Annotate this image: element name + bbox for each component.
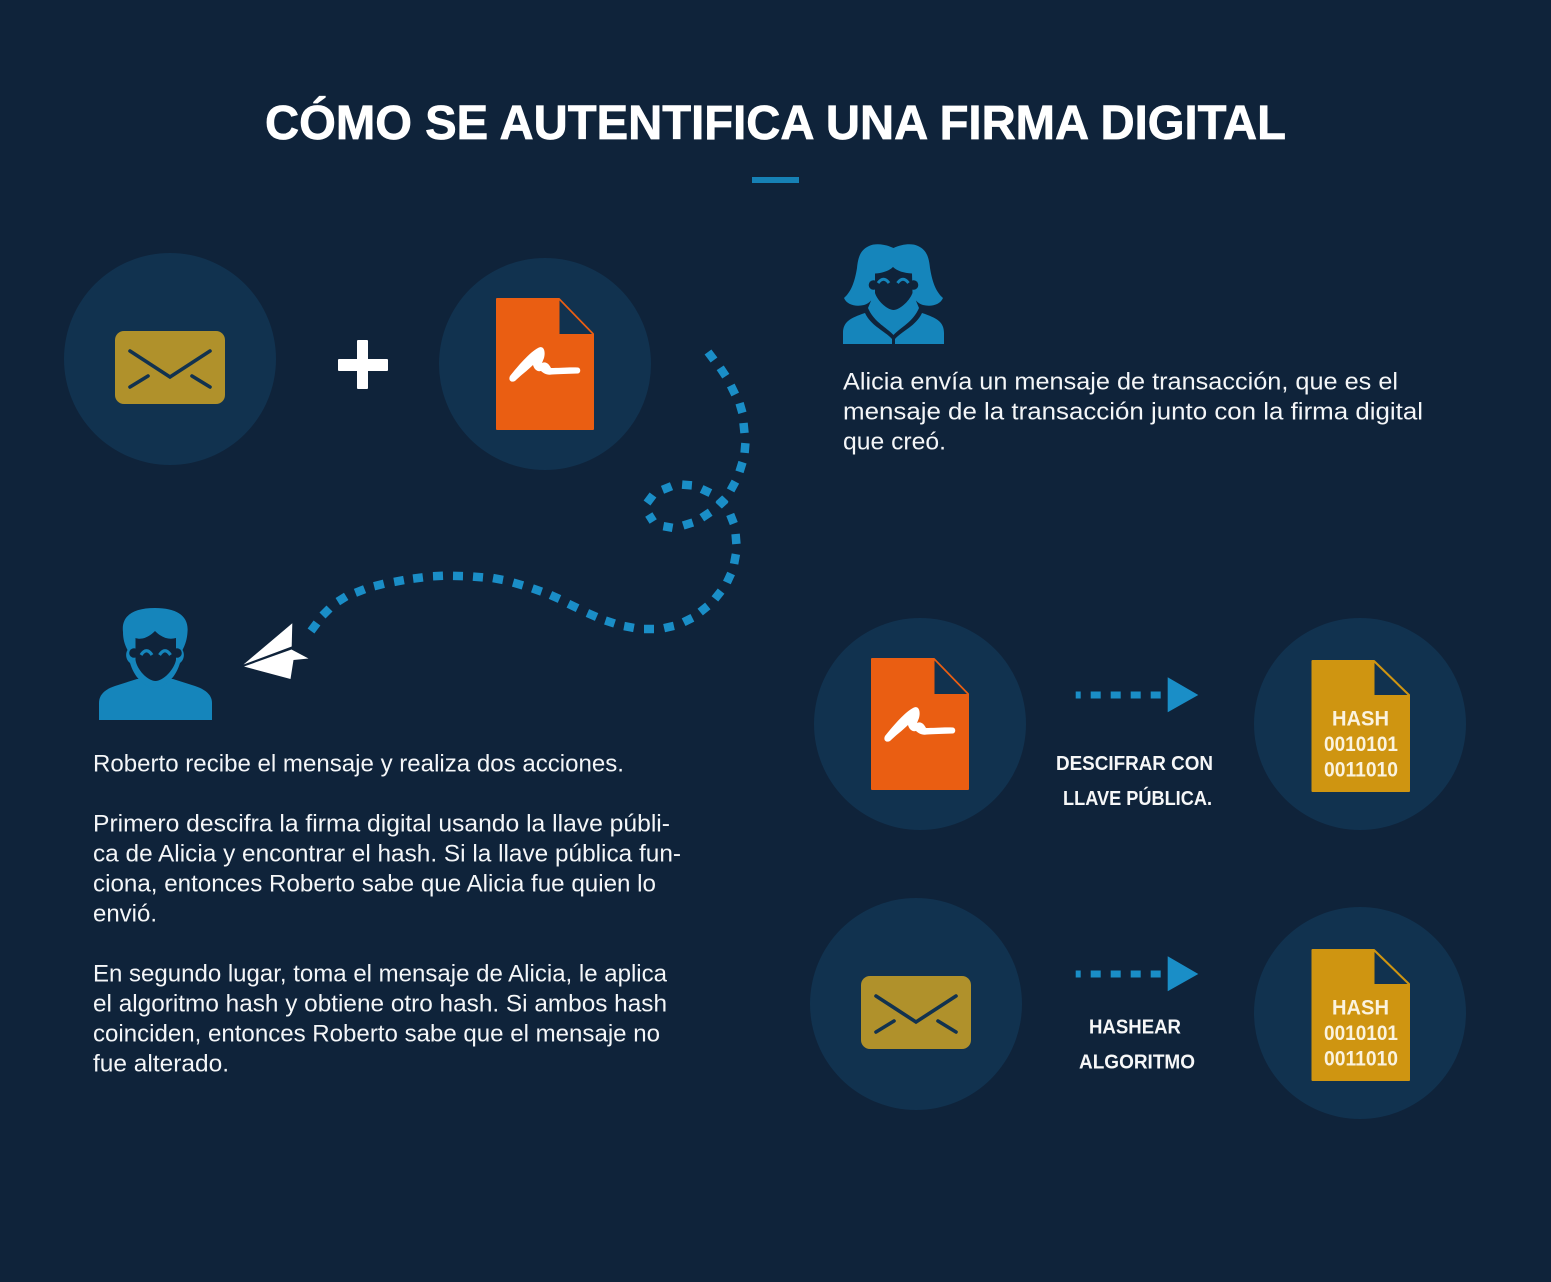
- panel: hash algorithm: [810, 898, 1466, 1119]
- label: descifrar con llave pública: DESCIFRAR CON: [1056, 753, 1213, 775]
- text: Roberto: En segundo lugar, toma el mensaje de Alicia, le aplica: [93, 960, 668, 988]
- text: Roberto: ca de Alicia y encontrar el hash. Si la llave pública fun-: [93, 840, 681, 868]
- text: Roberto: Primero descifra la firma digital usando la llave públi-: [93, 810, 670, 838]
- circle with hash document icon: HASH: [1332, 996, 1389, 1020]
- text: Alicia: mensaje de la transacción junto con la firma digital: [843, 398, 1423, 426]
- text: Alicia: Alicia envía un mensaje de transacción, que es el: [843, 368, 1398, 396]
- label: descifrar con llave pública: LLAVE PÚBLICA.: [1063, 786, 1212, 810]
- title underline: [752, 177, 799, 183]
- circle with hash document icon: [1254, 618, 1466, 830]
- arrow: dotted right: [1076, 677, 1198, 712]
- title: CÓMO SE AUTENTIFICA UNA FIRMA DIGITAL: [265, 95, 1286, 150]
- arrow: dotted right: [1076, 956, 1198, 991]
- panel: decrypt with public key: [814, 618, 1466, 830]
- text: Roberto: ciona, entonces Roberto sabe que Alicia fue quien lo: [93, 870, 656, 898]
- circle with hash document icon: 0010101: [1324, 1022, 1398, 1045]
- circle with signed document icon: [439, 258, 651, 470]
- icon: paper plane: [244, 623, 308, 679]
- label: descifrar con llave pública: [1056, 753, 1213, 810]
- arrow: dotted looping path: [311, 352, 745, 631]
- text: Roberto: fue alterado.: [93, 1050, 229, 1078]
- circle with hash document icon: [1254, 907, 1466, 1119]
- label: hashear algoritmo: [1079, 1016, 1195, 1074]
- text: Alicia: que creó.: [843, 428, 946, 456]
- text: Alicia: [843, 368, 1423, 456]
- icon: Roberto: [99, 608, 212, 720]
- circle with hash document icon: 0010101: [1324, 733, 1398, 756]
- icon: Alicia: [843, 244, 944, 344]
- circle with hash document icon: 0011010: [1324, 1048, 1398, 1070]
- plus sign: [339, 341, 387, 388]
- text: Roberto: envió.: [93, 900, 157, 928]
- label: hashear algoritmo: ALGORITMO: [1079, 1052, 1195, 1074]
- circle with hash document icon: HASH: [1332, 708, 1389, 730]
- circle with envelope icon: [810, 898, 1022, 1110]
- circle with hash document icon: 0011010: [1324, 758, 1398, 782]
- panel: message plus signature: [64, 253, 651, 470]
- circle with signed document icon: [814, 618, 1026, 830]
- text: Roberto: coinciden, entonces Roberto sabe que el mensaje no: [93, 1020, 660, 1048]
- text: Roberto: el algoritmo hash y obtiene otro hash. Si ambos hash: [93, 990, 667, 1018]
- text: Roberto: [93, 750, 681, 1078]
- label: hashear algoritmo: HASHEAR: [1089, 1016, 1182, 1038]
- circle with envelope icon: [64, 253, 276, 465]
- text: Roberto: Roberto recibe el mensaje y realiza dos acciones.: [93, 750, 624, 778]
